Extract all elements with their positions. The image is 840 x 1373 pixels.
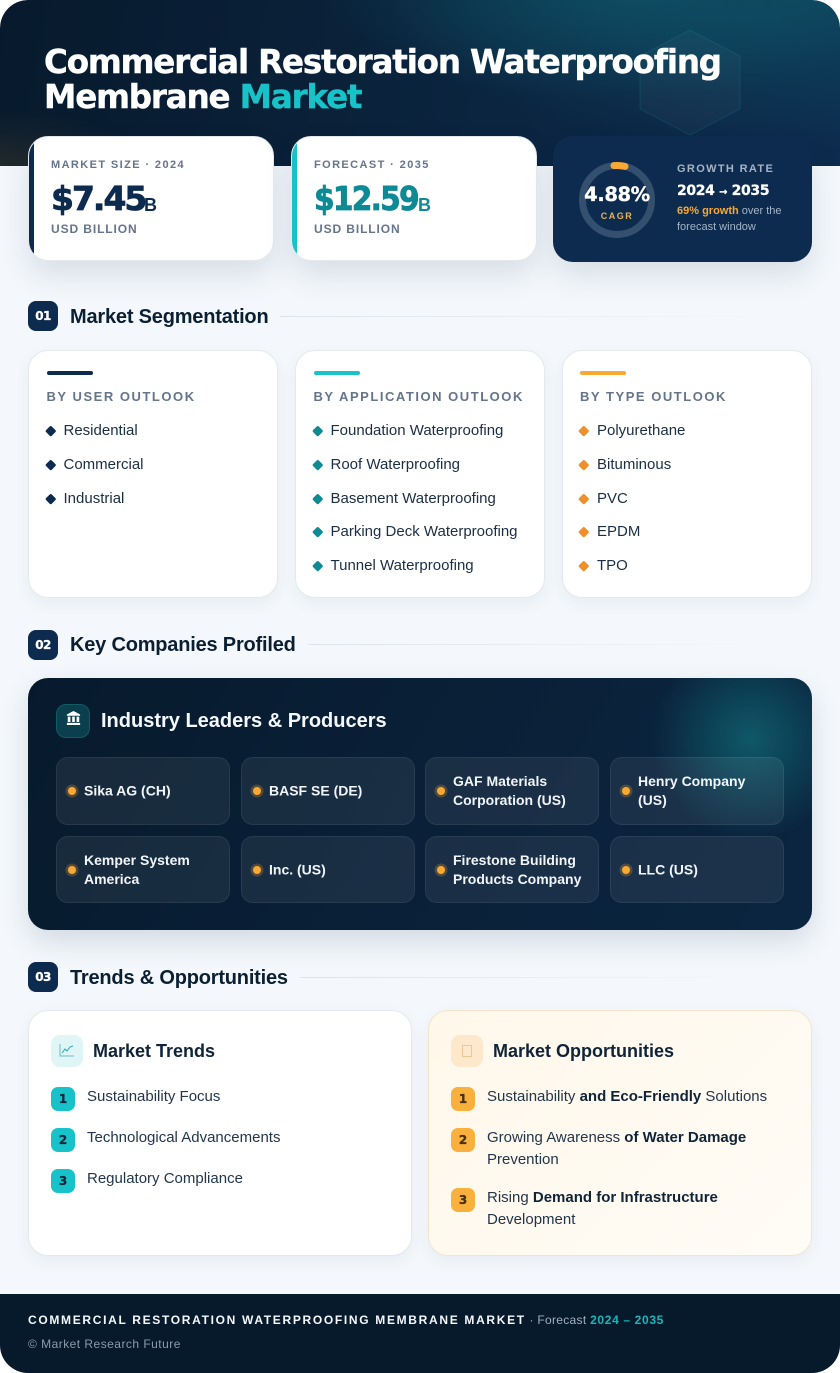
stat card: forecast 2035: USD BILLION: [314, 222, 401, 236]
trend 3: [51, 1169, 75, 1193]
stat card: market size 2024: USD BILLION: [51, 222, 138, 236]
stat card: market size 2024: B: [144, 195, 157, 215]
stat card: growth rate: [553, 136, 812, 262]
company chip: Kemper System: [56, 836, 230, 903]
heading: key companies: Key Companies Profiled: [70, 634, 296, 656]
opportunity 2: [451, 1128, 475, 1152]
panel: market trends: Sustainability Focus: [87, 1088, 220, 1105]
stat card: growth rate: forecast window: [677, 221, 756, 233]
company chip: Henry Company: [610, 757, 784, 825]
company chip: BASF SE: BASF SE (DE): [269, 782, 362, 798]
panel: by application outlook: Foundation Waterproofing: [330, 422, 503, 439]
heading: trends and opportunities: Trends & Opportunities: [70, 967, 288, 989]
panel: by application outlook: [295, 350, 545, 598]
icon: missing glyph box: [451, 1035, 483, 1067]
panel: by user outlook: Residential: [64, 422, 138, 439]
panel: market opportunities: Development: [487, 1211, 575, 1228]
footer: [0, 1294, 840, 1373]
company chip: LLC: LLC (US): [638, 861, 698, 877]
stat card: growth rate: CAGR: [601, 211, 633, 221]
trend 1: 1: [59, 1092, 67, 1106]
panel: by application outlook: BY APPLICATION OUTLOOK: [314, 389, 524, 404]
stat card: market size 2024: $7.45: [51, 179, 145, 218]
section badge 02: [28, 630, 58, 660]
company chip: GAF Materials: [425, 757, 599, 825]
stat card: market size 2024: [28, 136, 274, 261]
panel: market opportunities: Rising Demand for Infrastructure: [487, 1189, 718, 1206]
panel: market trends: [28, 1010, 412, 1256]
trend 3: 3: [59, 1174, 67, 1188]
panel: market opportunities: Growing Awareness of Water Damage: [487, 1129, 746, 1146]
panel: market trends: Regulatory Compliance: [87, 1170, 243, 1187]
panel: by user outlook: [28, 350, 278, 598]
header banner: [0, 0, 840, 166]
panel: by application outlook: Parking Deck Waterproofing: [330, 523, 518, 540]
stat card: forecast 2035: $12.59: [314, 179, 418, 218]
opportunity 3: [451, 1188, 475, 1212]
panel: industry leaders: [28, 678, 812, 930]
section badge 01: [28, 301, 58, 331]
company chip: Kemper System: Kemper System America: [84, 852, 190, 886]
heading: market segmentation: Market Segmentation: [70, 306, 268, 328]
chart: CAGR ring: [579, 162, 655, 238]
stat card: growth rate: 4.88%: [584, 183, 650, 206]
panel: by type outlook: PVC: [597, 490, 628, 507]
opportunity 2: 2: [459, 1133, 467, 1147]
company chip: Firestone: Firestone Building Products Company: [453, 852, 581, 886]
icon: chart: [51, 1035, 83, 1067]
opportunity 3: 3: [459, 1193, 467, 1207]
opportunity 1: 1: [459, 1092, 467, 1106]
panel: by user outlook: Commercial: [64, 456, 144, 473]
trend 1: [51, 1087, 75, 1111]
icon: institution: [56, 704, 90, 738]
section badge 03: 03: [35, 970, 51, 984]
icon: hexagon watermark: [640, 30, 740, 136]
panel: by type outlook: EPDM: [597, 523, 640, 540]
footer credit: © Market Research Future: [28, 1337, 181, 1351]
section badge 03: [28, 962, 58, 992]
panel: market opportunities: Sustainability and Eco-Friendly Solutions: [487, 1088, 767, 1105]
stat card: forecast 2035: [291, 136, 537, 261]
panel: by type outlook: TPO: [597, 557, 628, 574]
footer title line: COMMERCIAL RESTORATION WATERPROOFING MEMBRANE MARKET · Forecast 2024 – 2035: [28, 1313, 664, 1327]
stat card: market size 2024: MARKET SIZE · 2024: [51, 159, 185, 171]
company chip: Sika AG: [56, 757, 230, 825]
company chip: GAF Materials: GAF Materials Corporation (US): [453, 773, 566, 808]
panel: by user outlook: BY USER OUTLOOK: [46, 389, 196, 404]
panel: market trends: Technological Advancements: [87, 1129, 280, 1146]
panel: by application outlook: Tunnel Waterproofing: [330, 557, 474, 574]
opportunity 1: [451, 1087, 475, 1111]
panel: by type outlook: Bituminous: [597, 456, 671, 473]
panel: by type outlook: BY TYPE OUTLOOK: [580, 389, 727, 404]
panel heading: Market Trends: [93, 1041, 215, 1061]
title: Membrane Market: [44, 78, 361, 116]
panel: by application outlook: Basement Waterproofing: [330, 490, 496, 507]
panel: by type outlook: Polyurethane: [597, 422, 685, 439]
company chip: Inc.: Inc. (US): [269, 861, 326, 877]
section badge 02: 02: [35, 638, 51, 652]
company chip: Inc.: [241, 836, 415, 903]
panel heading: Industry Leaders & Producers: [101, 710, 387, 732]
panel: market opportunities: Prevention: [487, 1151, 559, 1168]
trend 2: [51, 1128, 75, 1152]
trend 2: 2: [59, 1133, 67, 1147]
panel: by user outlook: Industrial: [64, 490, 124, 507]
stat card: forecast 2035: FORECAST · 2035: [314, 159, 430, 171]
section badge 01: 01: [35, 309, 51, 323]
panel heading: Market Opportunities: [493, 1041, 674, 1061]
stat card: growth rate: 2024 → 2035: [677, 183, 769, 199]
panel: market opportunities: [428, 1010, 812, 1256]
title: Commercial Restoration Waterproofing: [44, 43, 721, 81]
panel: by application outlook: Roof Waterproofing: [330, 456, 460, 473]
company chip: Sika AG: Sika AG (CH): [84, 782, 171, 798]
stat card: growth rate: GROWTH RATE: [677, 163, 774, 175]
stat card: forecast 2035: B: [418, 195, 431, 215]
panel: by type outlook: [562, 350, 812, 598]
company chip: BASF SE: [241, 757, 415, 825]
company chip: Firestone: [425, 836, 599, 903]
title: [44, 43, 721, 116]
company chip: LLC: [610, 836, 784, 903]
company chip: Henry Company: Henry Company (US): [638, 773, 745, 808]
stat card: growth rate: 69% growth over the: [677, 205, 782, 217]
